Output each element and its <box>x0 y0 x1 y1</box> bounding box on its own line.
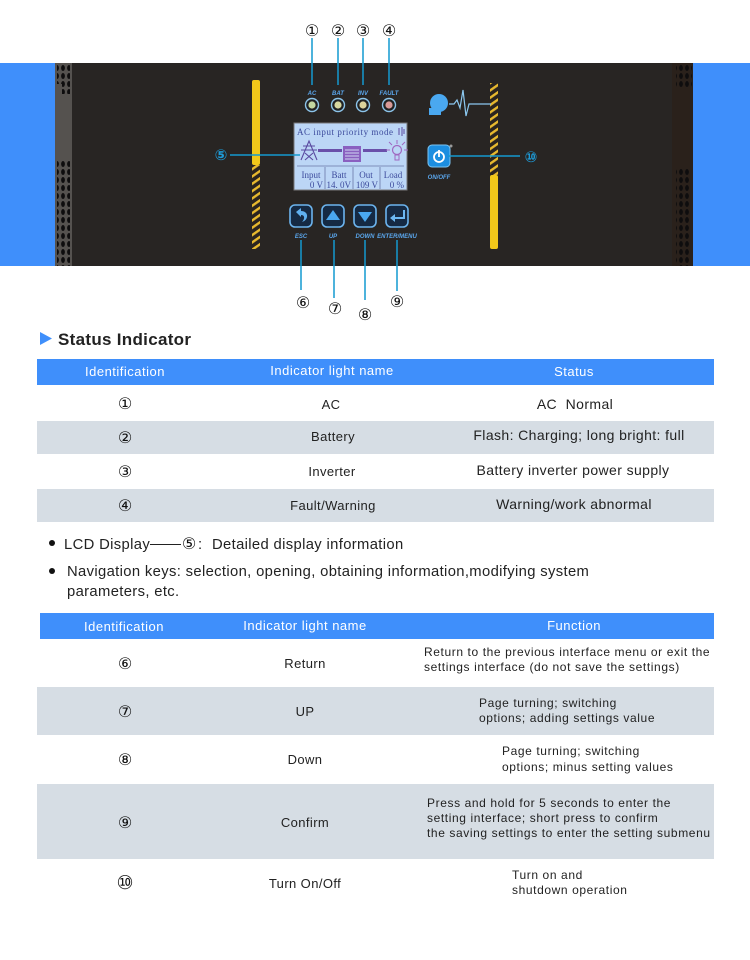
callout lines and numbers: ⑩ <box>525 148 537 166</box>
bullet list <box>49 534 589 600</box>
table: status indicators: Battery <box>311 429 355 444</box>
callout lines and numbers: ② <box>331 21 345 40</box>
table: navigation keys: Page turning; switching <box>479 696 617 710</box>
callout lines and numbers: ⑤ <box>215 146 227 164</box>
table: status indicators: Warning/work abnormal <box>496 496 652 512</box>
table: navigation keys: Press and hold for 5 seconds to enter the <box>427 796 671 810</box>
table: navigation keys: shutdown operation <box>512 883 628 897</box>
table: navigation keys: ⑧ <box>118 750 132 769</box>
table: status indicators: Inverter <box>308 464 356 479</box>
LCD display: Load <box>384 170 403 180</box>
table: navigation keys <box>37 613 714 897</box>
table: navigation keys: ⑩ <box>116 872 134 894</box>
table: navigation keys: Turn On/Off <box>269 876 341 891</box>
bullet list: Navigation keys: selection, opening, obtaining information,modifying system <box>67 564 589 580</box>
table: navigation keys: ⑨ <box>118 813 132 832</box>
LCD display: 0 V <box>310 180 323 190</box>
indicator LEDs: INV <box>358 91 369 97</box>
table: status indicators: ① <box>118 394 132 413</box>
bullet list: Detailed display information <box>212 537 404 553</box>
table: navigation keys: ⑥ <box>118 654 132 673</box>
callout lines and numbers <box>215 21 537 324</box>
navigation buttons: ESC <box>295 234 308 240</box>
table: navigation keys: options; minus setting values <box>502 760 673 774</box>
table: navigation keys: Confirm <box>281 815 329 830</box>
indicator LEDs <box>306 91 400 112</box>
table: status indicators: ② <box>118 428 132 447</box>
table: status indicators: ④ <box>118 496 132 515</box>
table: navigation keys: the saving settings to enter the setting submenu <box>427 826 711 840</box>
yellow hazard strip right <box>490 83 498 249</box>
table: navigation keys: options; adding settings value <box>479 711 655 725</box>
table: status indicators: Indicator light name <box>270 363 394 378</box>
table: navigation keys: settings interface (do not save the settings) <box>424 660 680 674</box>
bullet list: ⑤ <box>182 534 196 553</box>
bullet list: parameters, etc. <box>67 584 180 600</box>
table: status indicators: Fault/Warning <box>290 498 376 513</box>
LCD display: 109 V <box>356 180 378 190</box>
indicator LEDs: AC <box>307 91 317 97</box>
LCD display: Batt <box>332 170 347 180</box>
on/off button <box>428 144 452 181</box>
table: status indicators: AC <box>322 397 340 412</box>
navigation buttons: UP <box>329 234 338 240</box>
bullet list: LCD Display <box>64 537 150 553</box>
table: status indicators: AC Normal <box>537 396 613 412</box>
table: navigation keys: setting interface; short press to confirm <box>427 811 658 825</box>
table: navigation keys: Return <box>284 656 326 671</box>
on/off button: ON/OFF <box>428 175 451 181</box>
LCD display: 14. 0V <box>326 180 352 190</box>
table: status indicators: Identification <box>85 364 165 379</box>
table: navigation keys: Turn on and <box>512 868 583 882</box>
LCD display <box>294 123 408 190</box>
navigation buttons <box>290 205 417 240</box>
table: status indicators: ③ <box>118 462 132 481</box>
heading: Status Indicator: Status Indicator <box>58 330 191 349</box>
indicator LEDs: FAULT <box>380 91 400 97</box>
callout lines and numbers: ④ <box>382 21 396 40</box>
table: status indicators: Battery inverter power supply <box>477 462 669 478</box>
callout lines and numbers: ⑧ <box>358 305 372 324</box>
table: navigation keys: Down <box>288 752 322 767</box>
callout lines and numbers: ⑥ <box>296 293 310 312</box>
table: status indicators: Status <box>554 364 594 379</box>
table: navigation keys: Indicator light name <box>243 618 367 633</box>
callout lines and numbers: ③ <box>356 21 370 40</box>
table: status indicators <box>37 359 714 522</box>
LCD display: Input <box>302 170 321 180</box>
table: navigation keys: UP <box>296 704 314 719</box>
table: navigation keys: Return to the previous interface menu or exit the <box>424 645 710 659</box>
callout lines and numbers: ⑦ <box>328 299 342 318</box>
LCD display: AC input priority mode <box>297 127 393 137</box>
indicator LEDs: BAT <box>332 91 345 97</box>
LCD display: Out <box>359 170 373 180</box>
bullet list: : <box>198 537 202 553</box>
equipment panel photo <box>0 63 750 266</box>
logo with heartbeat <box>429 90 491 116</box>
callout lines and numbers: ⑨ <box>390 292 404 311</box>
yellow hazard strip left <box>252 80 260 249</box>
table: navigation keys: ⑦ <box>118 702 132 721</box>
navigation buttons: DOWN <box>356 234 375 240</box>
table: status indicators: Flash: Charging; long bright: full <box>473 427 685 443</box>
table: navigation keys: Identification <box>84 619 164 634</box>
LCD display: 0 % <box>390 180 404 190</box>
table: navigation keys: Function <box>547 618 601 633</box>
navigation buttons: ENTER/MENU <box>377 234 417 240</box>
callout lines and numbers: ① <box>305 21 319 40</box>
table: navigation keys: Page turning; switching <box>502 744 640 758</box>
